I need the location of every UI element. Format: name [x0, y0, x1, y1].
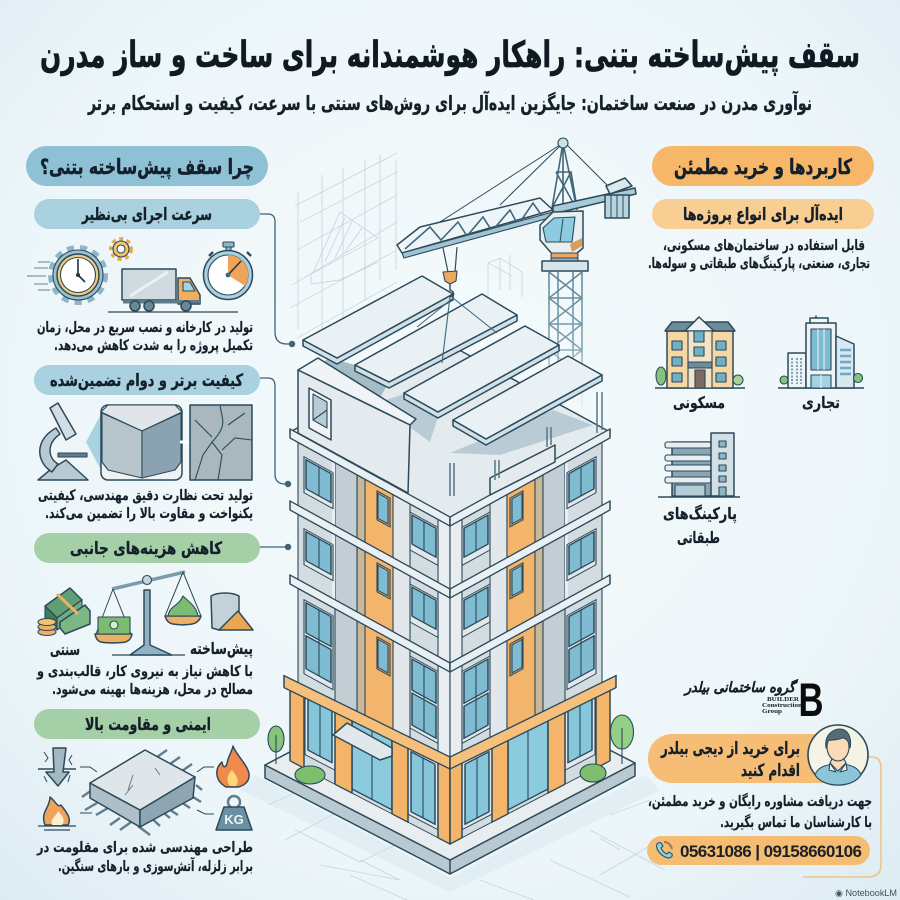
left panel: why precast [26, 146, 268, 875]
label: parking: طبقاتی [677, 528, 720, 547]
text: applications description [648, 238, 870, 272]
section: safety [34, 709, 260, 875]
pill: safety: ایمنی و مقاومت بالا [85, 715, 211, 735]
top deck [290, 345, 610, 518]
slab 4 [453, 356, 602, 445]
builder logo: Group [762, 709, 783, 715]
canopy [333, 723, 392, 760]
right facade [450, 442, 610, 844]
text: cost description: با کاهش نیاز به نیروی کار، قالب‌بندی و [36, 664, 253, 680]
watermark: notebooklm: ◉ NotebookLM [835, 888, 897, 898]
builder logo: B [798, 673, 824, 726]
heading: why precast: چرا سقف پیش‌ساخته بتنی؟ [40, 155, 254, 179]
section: speed [27, 199, 260, 354]
icon: materials [211, 593, 253, 630]
precast slabs [303, 276, 602, 445]
labels: traditional and precast: سنتی [50, 640, 80, 659]
icon: cracked concrete [190, 405, 252, 480]
label: residential: مسکونی [673, 393, 725, 412]
crane hook and slings [417, 247, 497, 363]
slab 2 [355, 294, 517, 388]
cta pill: اقدام کنید [741, 761, 800, 781]
icon: commercial building [778, 316, 864, 388]
slab 1 [303, 276, 453, 364]
crane counter jib [553, 188, 636, 214]
icon: money stacks [38, 588, 90, 636]
section: cost [34, 533, 260, 698]
icon: residential building [655, 317, 745, 388]
builder logo: گروه ساختمانی بیلدر [683, 679, 799, 696]
text: speed description: تولید در کارخانه و نصب سریع در محل، زمان [37, 320, 253, 336]
floor bands [284, 501, 616, 769]
icon: avatar [808, 725, 868, 785]
cta pill [648, 734, 848, 783]
phone pill: 05631086 | 09158660106 [680, 842, 862, 861]
label: commercial: تجاری [802, 393, 840, 412]
pill: ideal for projects [652, 199, 874, 229]
right panel: applications [647, 146, 881, 877]
heading: applications [652, 146, 874, 186]
pill: safety [34, 709, 260, 739]
crane cab [540, 211, 583, 255]
text: quality description: یکنواخت و مقاوت بالا را تضمین می‌کند. [45, 506, 253, 522]
pill: speed [34, 199, 260, 229]
icon: slab with rebar [82, 750, 202, 835]
text: quality description [38, 488, 253, 522]
concrete wall [298, 358, 416, 493]
pill: cost [34, 533, 260, 563]
pill: quality: کیفیت برتر و دوام تضمین‌شده [50, 371, 243, 391]
builder logo: BUILDER [767, 697, 800, 703]
icon: truck [108, 269, 238, 312]
icon: concrete cube [86, 405, 193, 480]
blueprint sketch background [290, 153, 522, 338]
call to action [647, 725, 881, 877]
pill: quality [34, 365, 260, 395]
icon: balance scale [95, 572, 201, 655]
ground plan lines [268, 770, 665, 900]
platform shadow [240, 775, 660, 892]
pill: cost: کاهش هزینه‌های جانبی [70, 539, 222, 559]
left facade [290, 442, 450, 844]
crane cables [440, 143, 607, 222]
text: safety description [36, 840, 253, 875]
text: cost description [36, 664, 253, 698]
illustration: crane [397, 138, 636, 410]
icon: clock in gear [27, 248, 105, 302]
label: parking: پارکینگ‌های [663, 504, 737, 524]
icon: small gear [111, 239, 131, 259]
text: safety description: برابر زلزله، آتش‌سوزی و بارهای سنگین. [58, 857, 253, 875]
crane tower [549, 272, 582, 410]
icon: kg weight [197, 796, 252, 830]
icon: microscope [38, 403, 88, 480]
icon: fire on floor [38, 797, 76, 830]
labels: traditional and precast [50, 639, 253, 659]
text: cta description [648, 792, 872, 831]
text: safety description: طراحی مهندسی شده برای مقلومت در [36, 840, 253, 856]
builder logo [683, 673, 824, 726]
text: speed description [37, 320, 253, 354]
icon: earthquake [38, 748, 97, 813]
slab 3 [404, 326, 559, 418]
building [284, 345, 616, 844]
text: speed description: تکمیل پروژه را به شدت کاهش می‌دهد. [54, 338, 253, 354]
cta border line [803, 757, 881, 877]
section: quality [34, 365, 260, 522]
base platform [265, 668, 635, 874]
pill: speed: سرعت اجرای بی‌نظیر [81, 205, 212, 225]
icon: flame [197, 746, 249, 787]
pill: ideal for projects: ایده‌آل برای انواع پروژه‌ها [683, 203, 843, 225]
crane jib [397, 198, 553, 253]
connectors [260, 214, 295, 550]
tree left [268, 726, 284, 752]
icon: stopwatch [204, 242, 252, 300]
trees [268, 715, 634, 764]
tree right [610, 715, 634, 749]
crane mast [552, 143, 577, 210]
labels: traditional and precast: پیش‌ساخته [190, 639, 253, 659]
bushes [295, 764, 606, 784]
icon: kg weight: KG [224, 812, 244, 827]
text: quality description: تولید تحت نظارت دقیق مهندسی، کیفیتی [38, 488, 253, 504]
text: cost description: مصالح در محل، هزینه‌ها بهینه می‌شود. [52, 682, 253, 698]
heading: why precast [26, 146, 268, 186]
phone pill [647, 836, 870, 865]
parapet wall and rebars [450, 392, 602, 496]
icon: parking building [658, 433, 740, 497]
label: parking [663, 504, 737, 547]
builder logo: Construction [762, 703, 803, 709]
cta pill: برای خرید از دیجی بیلدر [660, 739, 800, 759]
